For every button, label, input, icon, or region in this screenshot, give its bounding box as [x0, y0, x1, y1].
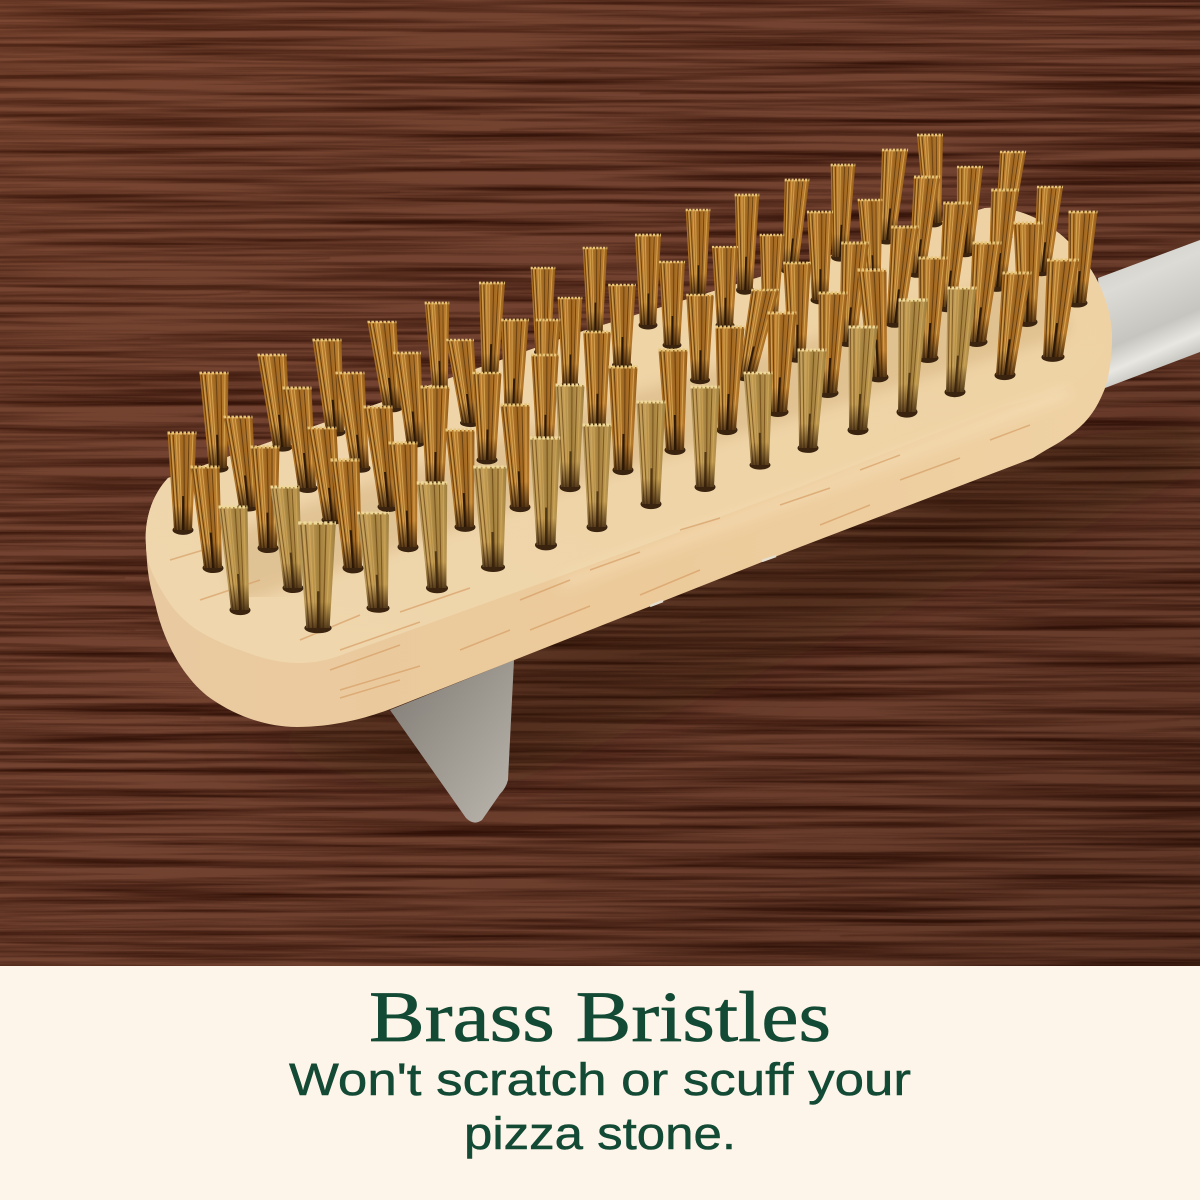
bright highlight along the block edge — [560, 392, 1070, 585]
block front face — [146, 208, 1112, 727]
row 3 — [190, 187, 1063, 573]
caption panel — [0, 966, 1200, 1200]
heading: Brass Bristles — [369, 977, 831, 1057]
row 5 (back) — [200, 135, 946, 473]
row 4 — [168, 152, 1026, 535]
subheading text — [289, 1054, 911, 1159]
metal scraper blade — [390, 660, 514, 823]
brush wooden block — [146, 208, 1112, 727]
subheading text: pizza stone. — [464, 1108, 736, 1159]
subheading text: Won't scratch or scuff your — [289, 1054, 911, 1105]
brush shadow on table — [230, 420, 1200, 790]
notches on front edge — [650, 556, 776, 606]
bristle tufts — [168, 135, 1098, 633]
soft shading behind the bristle rows — [230, 300, 1060, 570]
row 2 — [218, 212, 1098, 615]
table grain streaks — [0, 13, 1200, 936]
metal handle — [1098, 240, 1200, 388]
wood grain — [170, 425, 1030, 698]
block top face — [146, 208, 1108, 663]
row 1 (front) — [298, 260, 1079, 633]
